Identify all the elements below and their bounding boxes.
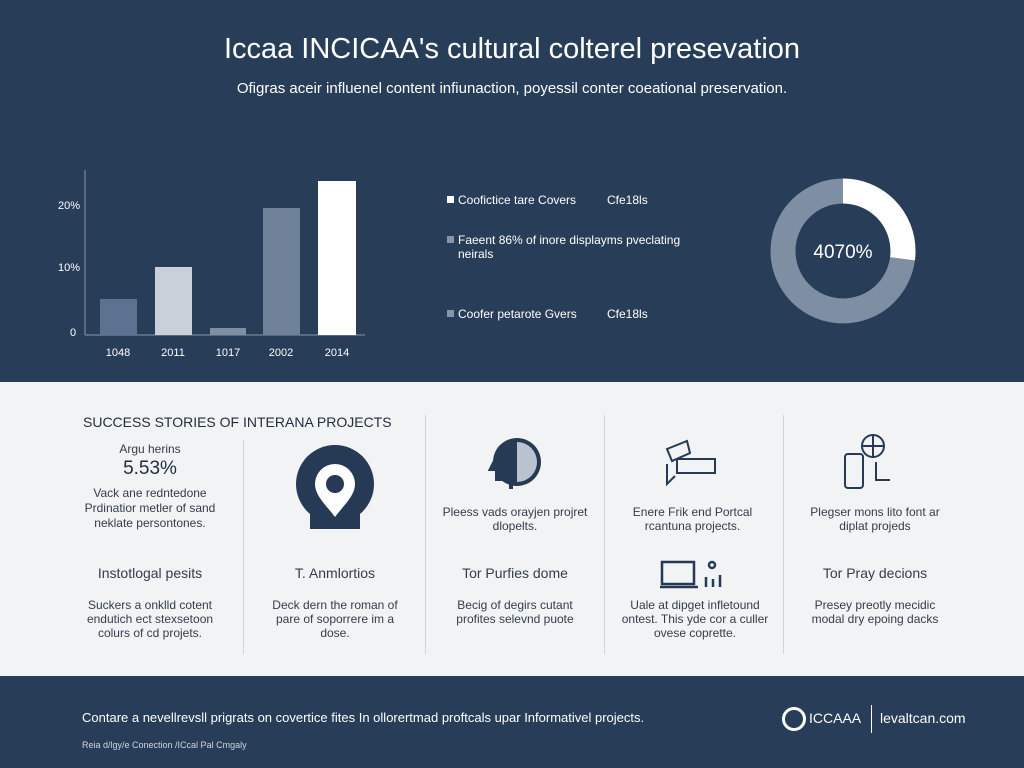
legend: Faeent 86% of inore displayms pveclating bbox=[458, 233, 680, 247]
panel: success stories: Presey preotly mecidic modal dry epoing dacks bbox=[812, 598, 938, 626]
legend: neirals bbox=[458, 247, 493, 261]
panel: success stories: T. Anmlortios bbox=[295, 565, 375, 581]
stat block: 5.53% bbox=[123, 458, 177, 479]
bar chart: 20% bbox=[58, 200, 80, 212]
panel: success stories: Becig of degirs cutant profites selevnd puote bbox=[456, 598, 574, 626]
title: Iccaa INCICAA's cultural colterel presevation bbox=[224, 33, 800, 65]
icon: location pin bbox=[296, 445, 374, 529]
heading: SUCCESS STORIES OF INTERANA PROJECTS bbox=[83, 414, 392, 430]
panel: success stories: Enere Frik end Portcal rcantuna projects. bbox=[633, 505, 752, 533]
panel: success stories: Tor Pray decions bbox=[823, 565, 927, 581]
bar chart bbox=[58, 170, 365, 359]
row 2 headings: Instotlogal pesits bbox=[98, 565, 202, 581]
icon: head globe bbox=[488, 438, 541, 489]
footer logo: ICCAAA bbox=[809, 710, 861, 726]
text: Reia d/lgy/e Conection /ICcal Pal Cmgaly bbox=[82, 740, 247, 750]
bar chart: 0 bbox=[70, 327, 76, 339]
donut chart bbox=[770, 178, 916, 324]
row 2 texts: Suckers a onklld cotent endutich ect stexsetoon colurs of cd projets. bbox=[87, 598, 213, 640]
legend: Cfe18ls bbox=[607, 193, 648, 207]
footer text: Contare a nevellrevsll prigrats on covertice fites In ollorertmad proftcals upar Informativel projects. bbox=[82, 710, 644, 725]
bar chart: 2002 bbox=[269, 347, 293, 359]
panel: success stories: Plegser mons lito font ar diplat projeds bbox=[810, 505, 940, 533]
panel: success stories: Pleess vads orayjen projret dlopelts. bbox=[443, 505, 587, 533]
legend: Cfe18ls bbox=[607, 307, 648, 321]
bar chart: 1048 bbox=[106, 347, 130, 359]
icon: phone touch bbox=[844, 434, 890, 489]
footer logo bbox=[782, 705, 966, 733]
legend bbox=[447, 193, 680, 321]
icon: document hand bbox=[666, 440, 716, 486]
donut chart: 4070% bbox=[813, 242, 873, 263]
panel: success stories: Uale at dipget infletound ontest. This yde cor a culler ovese coprette. bbox=[622, 598, 768, 640]
subtitle: Ofigras aceir influenel content infiunaction, poyessil conter coeational preservation. bbox=[237, 80, 787, 97]
bar chart: 10% bbox=[58, 262, 80, 274]
bar chart: 2014 bbox=[325, 347, 349, 359]
panel: success stories: Deck dern the roman of pare of soporrere im a dose. bbox=[272, 598, 398, 640]
bar chart: 2011 bbox=[161, 347, 185, 359]
legend: Coofictice tare Covers bbox=[458, 193, 576, 207]
stat block: Argu herins Vack ane redntedone Prdinatior metler of sand neklate persontones. bbox=[85, 442, 215, 530]
panel: success stories: Tor Purfies dome bbox=[462, 565, 568, 581]
icon: laptop chart bbox=[660, 560, 722, 588]
footer logo: levaltcan.com bbox=[880, 710, 966, 726]
panel: success stories bbox=[0, 382, 1024, 676]
legend: Coofer petarote Gvers bbox=[458, 307, 577, 321]
bar chart: 1017 bbox=[216, 347, 240, 359]
